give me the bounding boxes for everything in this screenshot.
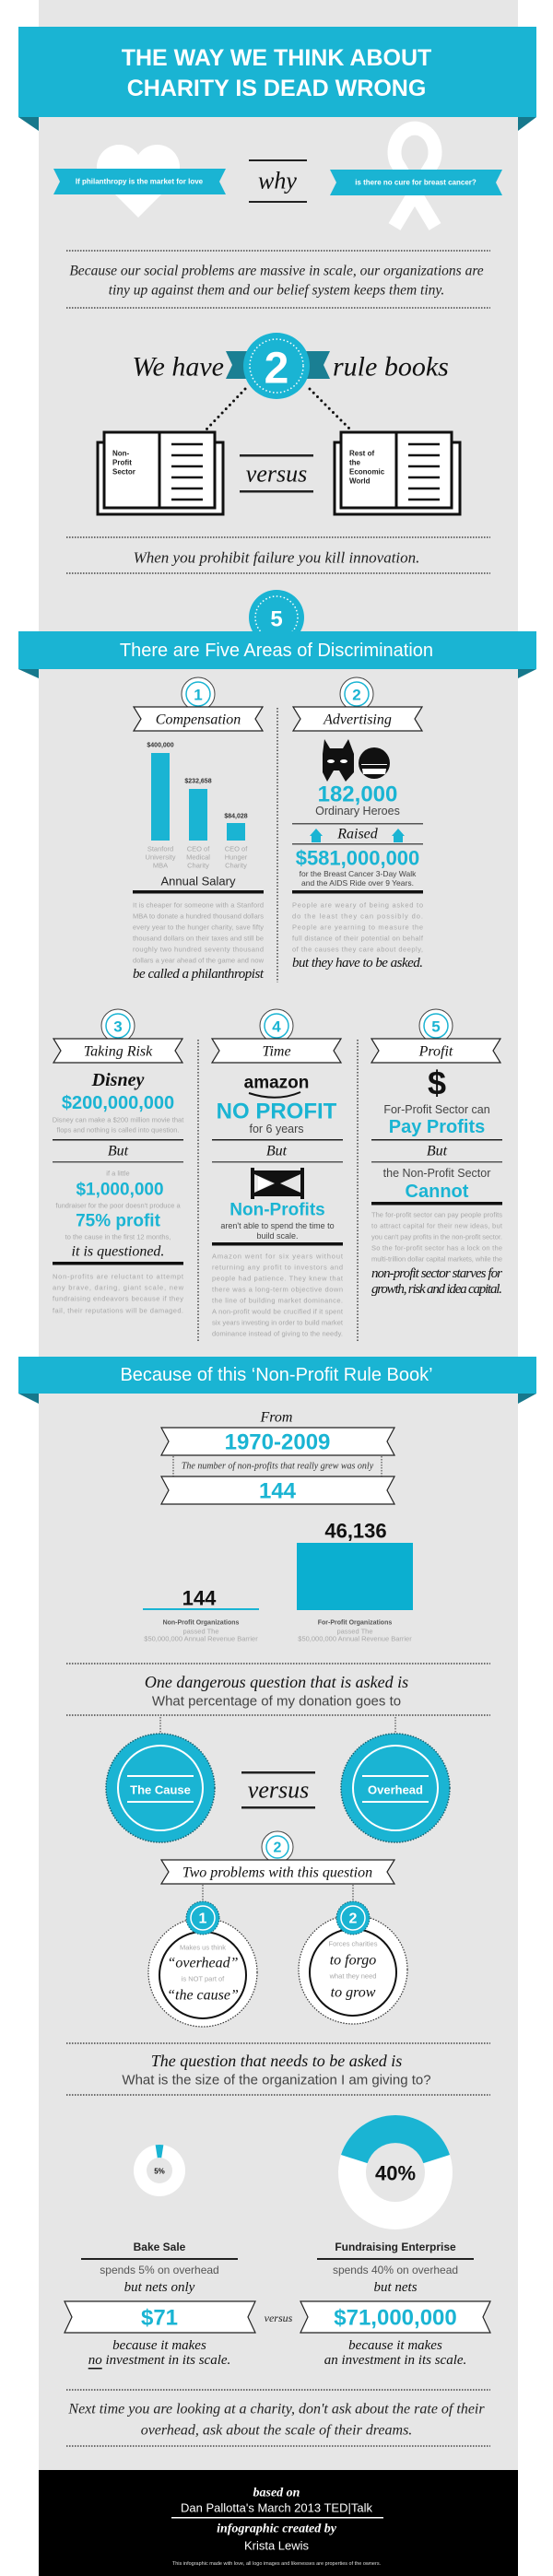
fundraising enterprise comparison: spends 40% on overhead: [333, 2264, 458, 2276]
title banner: CHARITY IS DEAD WRONG: [127, 76, 426, 101]
problem 2: to grow: [331, 1985, 376, 2000]
right question: [122, 2052, 431, 2088]
panel: taking risk: $1,000,000: [76, 1180, 164, 1200]
circle: overhead: [341, 1734, 450, 1842]
footer: infographic created by: [217, 2522, 337, 2536]
icon: book non-profit: Profit: [112, 459, 132, 466]
panel: compensation: thousand dollars on their taxes and still be: [133, 935, 264, 942]
panel: profit: Cannot: [406, 1182, 469, 1202]
icon: book rest of world: Rest of: [349, 450, 374, 457]
panel: compensation: MBA: [153, 861, 168, 870]
panel: profit: The for-profit sector can pay people profits: [371, 1211, 502, 1218]
panel: taking risk: flops and nothing is called into question.: [56, 1126, 180, 1134]
footer: This infographic made with love, all logo images and likenesses are properties of the owners.: [172, 2561, 382, 2567]
panel: advertising: 2: [352, 686, 361, 704]
two problems ribbon: [161, 1831, 394, 1884]
fundraising enterprise comparison: Fundraising Enterprise: [335, 2241, 456, 2253]
panel: time: dominance instead of giving to the needy.: [212, 1329, 343, 1338]
title banner: THE WAY WE THINK ABOUT: [122, 45, 431, 71]
donut: bake sale 5%: 5%: [154, 2168, 165, 2175]
icon: book non-profit: [98, 432, 223, 514]
panel: time: for 6 years: [249, 1123, 304, 1135]
chart: revenue barrier comparison: $50,000,000 Annual Revenue Barrier: [298, 1635, 412, 1642]
panel: profit: 5: [431, 1017, 441, 1036]
panel: compensation: Charity: [225, 861, 247, 870]
circle: the cause: The Cause: [130, 1782, 191, 1797]
panel: advertising: Ordinary Heroes: [315, 805, 400, 817]
panel: time: Amazon went for six years without: [212, 1252, 344, 1261]
statement text: [69, 264, 484, 299]
panel: compensation: Charity: [187, 861, 209, 870]
panel: taking risk: Non-profits are reluctant to attempt: [53, 1272, 184, 1281]
versus: [241, 1771, 315, 1808]
footer: [39, 2470, 518, 2576]
panel: advertising: $581,000,000: [296, 846, 419, 870]
panel: time: Non-Profits: [229, 1200, 325, 1220]
panel: compensation: Annual Salary: [161, 874, 236, 888]
panel: time: Time: [262, 1043, 291, 1060]
banner: non-profit rule book: Because of this ‘Non-Profit Rule Book’: [120, 1365, 433, 1385]
versus: versus: [248, 1777, 309, 1803]
heading: we have 2 rule books: We have: [132, 352, 224, 382]
closing statement: Next time you are looking at a charity, don't ask about the rate of their: [67, 2402, 485, 2417]
panel: taking risk: to the cause in the first 12 months,: [65, 1233, 171, 1241]
chart: revenue barrier comparison: 144: [182, 1587, 217, 1609]
panel: profit: Pay Profits: [389, 1117, 485, 1137]
versus: versus: [246, 461, 307, 487]
panel: compensation: It is cheaper for someone with a Stanford: [133, 901, 264, 909]
panel: taking risk: Taking Risk: [84, 1043, 153, 1060]
chart: revenue barrier comparison: [143, 1519, 413, 1642]
panel: compensation: 1: [194, 686, 203, 704]
ribbon: philanthropy question: [53, 169, 226, 194]
panel: taking risk: if a little: [106, 1169, 130, 1178]
panel: profit: growth, risk and idea capital.: [371, 1282, 502, 1297]
problem 1: “the cause”: [167, 1987, 239, 2004]
panel: taking risk: But: [108, 1143, 129, 1159]
panel: advertising: People are weary of being asked to: [292, 901, 423, 909]
panel: compensation: Medical: [186, 853, 210, 861]
problem 1: 1: [199, 1911, 207, 1926]
from 1970-2009 ribbon: 1970-2009: [225, 1430, 330, 1454]
heading: we have 2 rule books: rule books: [333, 352, 449, 382]
footer: Krista Lewis: [244, 2538, 310, 2553]
panel: time: A non-profit would be crucified if it spent: [212, 1307, 344, 1316]
panel: compensation: Compensation: [156, 712, 241, 728]
ribbon: breast cancer question: [330, 170, 502, 195]
banner: five areas: 5: [270, 606, 283, 632]
ribbon: breast cancer question: is there no cure for breast cancer?: [355, 179, 477, 186]
icon: book rest of world: World: [349, 477, 371, 485]
bake sale comparison: because it makes: [112, 2338, 206, 2353]
two problems ribbon: 2: [274, 1840, 282, 1856]
panel: taking risk: $200,000,000: [62, 1093, 174, 1113]
footer: based on: [253, 2487, 300, 2500]
dangerous question: One dangerous question that is asked is: [145, 1673, 408, 1691]
chart: revenue barrier comparison: For-Profit Organizations: [318, 1620, 392, 1626]
why: why: [258, 168, 297, 194]
fundraising enterprise comparison: $71,000,000: [334, 2306, 457, 2330]
panel: advertising: People are yearning to measure the: [292, 923, 423, 931]
panel: compensation: CEO of: [187, 844, 210, 853]
panel: time: there was a long-term objective down: [212, 1285, 343, 1294]
panel: taking risk: Disney can make a $200 million movie that: [53, 1115, 184, 1124]
panel: advertising: do the least they can possibly do.: [292, 912, 423, 920]
panel: advertising: of the causes they care about deeply,: [292, 946, 423, 953]
panel: taking risk: [53, 1009, 184, 1314]
bake sale comparison: spends 5% on overhead: [100, 2264, 219, 2276]
panel: profit: the Non-Profit Sector: [383, 1167, 490, 1180]
icon: hourglass: [251, 1168, 304, 1199]
chart: revenue barrier comparison: 46,136: [324, 1519, 387, 1543]
problem 2: [299, 1901, 407, 2024]
problem 2: 2: [349, 1911, 358, 1926]
panel: profit: So the for-profit sector has a lock on the: [371, 1244, 502, 1252]
panel: time: the line of building market dominance.: [212, 1296, 343, 1305]
icon: book rest of world: Economic: [349, 468, 385, 476]
growth note and 144 ribbon: The number of non-profits that really grew was only: [182, 1462, 374, 1471]
panel: compensation: MBA to donate a hundred thousand dollars: [133, 912, 264, 920]
innovation statement: When you prohibit failure you kill innovation.: [134, 549, 419, 566]
statement text: Because our social problems are massive in scale, our organizations are: [69, 264, 484, 278]
icon: book rest of world: [335, 432, 460, 514]
two problems ribbon: Two problems with this question: [182, 1865, 372, 1880]
right question: The question that needs to be asked is: [151, 2052, 402, 2070]
panel: time: 4: [272, 1017, 281, 1036]
panel: taking risk: fundraiser for the poor doesn't produce a: [55, 1202, 181, 1209]
from 1970-2009 ribbon: [161, 1410, 394, 1455]
right question: What is the size of the organization I am giving to?: [122, 2072, 431, 2088]
circle: overhead: Overhead: [368, 1782, 423, 1797]
panel: time: But: [266, 1143, 288, 1159]
dangerous question: [145, 1673, 408, 1709]
fundraising enterprise comparison: [300, 2241, 490, 2368]
panel: compensation: dollars a year ahead of the game and now: [133, 957, 265, 964]
bake sale comparison: $71: [141, 2306, 178, 2330]
panel: time: NO PROFIT: [217, 1099, 337, 1124]
banner: non-profit rule book: [18, 1357, 536, 1404]
panel: compensation: CEO of: [225, 844, 248, 853]
icon: book non-profit: Sector: [112, 468, 135, 476]
versus: [240, 454, 313, 492]
banner: five areas: There are Five Areas of Discrimination: [120, 641, 433, 661]
versus small: versus: [265, 2311, 293, 2324]
panel: compensation: $84,028: [224, 813, 248, 820]
why: [249, 159, 307, 203]
panel: compensation: every year to the hunger charity, save fifty: [133, 923, 264, 931]
problem 1: “overhead”: [167, 1956, 239, 1970]
panel: profit: to attract capital for their new ideas, but: [371, 1222, 503, 1229]
panel: profit: multi-trillion dollar capital markets, while the: [371, 1255, 502, 1263]
bake sale comparison: but nets only: [124, 2280, 195, 2295]
problem 2: what they need: [329, 1972, 376, 1980]
bake sale comparison: no investment in its scale.: [88, 2353, 230, 2368]
icon: book non-profit: Non-: [112, 450, 130, 457]
icon: dollar sign: $: [428, 1064, 446, 1102]
panel: compensation: $400,000: [147, 743, 174, 748]
heading: we have 2 rule books: 2: [265, 345, 288, 393]
panel: time: people had patience. They knew that: [212, 1274, 344, 1283]
panel: compensation: be called a philanthropist: [133, 967, 265, 982]
panel: profit: non-profit sector starves for: [371, 1266, 502, 1281]
dangerous question: What percentage of my donation goes to: [152, 1694, 401, 1709]
bake sale comparison: [65, 2241, 255, 2368]
growth note and 144 ribbon: 144: [259, 1478, 297, 1504]
bake sale comparison: Bake Sale: [134, 2241, 186, 2253]
panel: advertising: Advertising: [323, 712, 392, 728]
panel: profit: you can't pay profits in the non-profit sector.: [371, 1233, 502, 1241]
icon: awareness ribbon: [394, 128, 435, 227]
heading: we have 2 rule books: [132, 333, 449, 399]
from 1970-2009 ribbon: From: [260, 1410, 292, 1425]
panel: profit: For-Profit Sector can: [383, 1103, 490, 1116]
panel: compensation: $232,658: [184, 778, 212, 785]
panel: advertising: Raised: [336, 826, 379, 842]
panel: advertising: for the Breast Cancer 3-Day Walk: [300, 869, 417, 878]
closing statement: [67, 2402, 485, 2439]
fundraising enterprise comparison: because it makes: [348, 2338, 442, 2353]
panel: taking risk: 75% profit: [76, 1211, 161, 1231]
panel: profit: But: [427, 1143, 448, 1159]
panel: advertising: [292, 677, 424, 970]
icon: batman and robin masks: [323, 739, 390, 782]
panel: time: [212, 1009, 344, 1338]
panel: time: aren't able to spend the time to: [220, 1221, 335, 1230]
ribbon: philanthropy question: If philanthropy is the market for love: [76, 177, 204, 186]
panel: compensation: Stanford: [147, 844, 173, 853]
panel: taking risk: any brave, daring, giant scale, new: [53, 1283, 184, 1292]
statement text: tiny up against them and our belief system keeps them tiny.: [109, 282, 444, 299]
panel: advertising: and the AIDS Ride over 9 Years.: [301, 878, 414, 888]
problem 2: Forces charities: [329, 1939, 378, 1948]
panel: taking risk: fail, their reputations will be damaged.: [53, 1307, 183, 1314]
donut: fundraising enterprise 40%: [338, 2115, 453, 2229]
panel: profit: Profit: [418, 1043, 453, 1060]
panel: taking risk: 3: [113, 1017, 123, 1036]
panel: compensation: [133, 677, 265, 982]
panel: compensation: roughly two hundred seventy thousand: [133, 946, 264, 953]
chart: revenue barrier comparison: passed The: [336, 1628, 373, 1635]
banner: five areas: [18, 590, 536, 678]
problem 2: to forgo: [330, 1952, 376, 1969]
fundraising enterprise comparison: an investment in its scale.: [324, 2353, 466, 2368]
panel: compensation: Hunger: [225, 853, 248, 861]
chart: revenue barrier comparison: $50,000,000 Annual Revenue Barrier: [144, 1635, 258, 1642]
panel: compensation: University: [146, 853, 176, 861]
problem 1: [148, 1901, 257, 2027]
panel: time: build scale.: [256, 1231, 299, 1241]
panel: profit: [371, 1009, 503, 1297]
chart: revenue barrier comparison: Non-Profit Organizations: [163, 1620, 240, 1626]
donut: bake sale 5%: [134, 2145, 185, 2196]
panel: taking risk: it is questioned.: [72, 1244, 164, 1259]
panel: advertising: 182,000: [318, 782, 397, 807]
panel: advertising: but they have to be asked.: [292, 956, 423, 970]
problem 1: Makes us think: [180, 1943, 226, 1952]
fundraising enterprise comparison: but nets: [373, 2280, 418, 2295]
panel: time: six years investing in order to build market: [212, 1318, 344, 1327]
chart: revenue barrier comparison: passed The: [182, 1628, 219, 1635]
icon: heart: [97, 145, 180, 218]
closing statement: overhead, ask about the scale of their dreams.: [141, 2422, 412, 2439]
donut: fundraising enterprise 40%: 40%: [375, 2162, 416, 2184]
panel: time: returning any profit to investors and: [212, 1263, 343, 1272]
footer: Dan Pallotta's March 2013 TED|Talk: [181, 2501, 372, 2514]
logo: disney: Disney: [91, 1070, 144, 1090]
panel: taking risk: fundraising endeavors because if they: [53, 1294, 183, 1303]
growth note and 144 ribbon: [161, 1462, 394, 1504]
title banner: [18, 27, 536, 131]
problem 1: is NOT part of: [182, 1974, 225, 1983]
circle: the cause: [106, 1734, 215, 1842]
logo: amazon: amazon: [244, 1073, 309, 1093]
panel: advertising: full distance of their potential on behalf: [292, 935, 424, 942]
icon: book rest of world: the: [349, 459, 361, 466]
